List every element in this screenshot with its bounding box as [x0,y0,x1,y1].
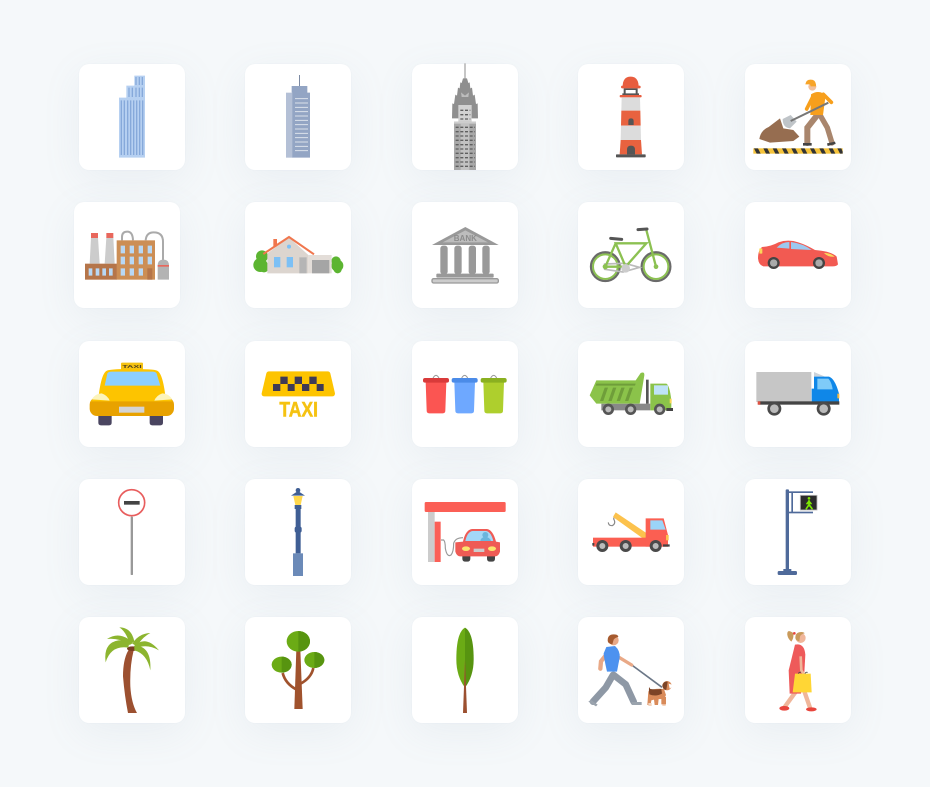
icon: art deco skyscraper [452,63,478,170]
panel: pedestrian signal card [745,479,851,585]
panel: taxi front card [79,341,185,447]
icon: taxi roof sign [262,371,335,421]
panel: no entry sign card [79,479,185,585]
icon: man walking dog [588,634,672,706]
panel: dump truck card [578,341,684,447]
panel: petrol station card [412,479,518,585]
panel: woman shopping card [745,617,851,723]
icon: green dump truck [590,372,673,415]
panel: tow truck card [578,479,684,585]
panel: palm tree card [79,617,185,723]
panel: taxi sign card [245,341,351,447]
icon: yellow taxi front view [90,362,174,426]
icon: petrol station with car [424,502,506,562]
panel: art deco tower card [412,64,518,170]
panel: street lamp card [245,479,351,585]
icon: lighthouse [616,76,646,158]
icon: box truck [756,372,840,416]
icon: factory [85,230,169,280]
panel: factory card [74,202,180,308]
panel: poplar tree card [412,617,518,723]
panel: office tower card [245,64,351,170]
icon: no entry road sign [118,488,146,575]
icon: street lamp [291,488,305,576]
panel: round tree card [245,617,351,723]
icon: poplar tree [456,628,474,713]
icon: green bicycle [590,228,672,282]
panel: delivery truck card [745,341,851,447]
icon: grey-blue office tower [286,75,310,158]
icon: tree with three crowns [272,631,324,709]
icon: red sedan [758,240,838,269]
panel: red car card [745,202,851,308]
icon: worker shovelling [753,80,843,154]
icon: palm tree [105,627,159,713]
panel: house card [245,202,351,308]
icon: suburban house [253,236,344,274]
panel: bank card [412,202,518,308]
icon: woman with shopping bag [779,631,817,712]
icon: three waste bins [423,374,507,414]
panel: lighthouse card [578,64,684,170]
icon: tow truck [592,512,670,552]
panel: skyscraper card [79,64,185,170]
bank label: BANK [453,234,477,243]
panel: waste bins card [412,341,518,447]
icon: bank building [431,227,499,284]
taxi roof label: TAXI [122,364,141,369]
icon: pedestrian crossing signal [778,489,818,575]
panel: man walking dog card [578,617,684,723]
icon: blue skyscraper [119,76,145,158]
panel: bicycle card [578,202,684,308]
taxi word: TAXI [279,397,318,421]
panel: construction worker card [745,64,851,170]
